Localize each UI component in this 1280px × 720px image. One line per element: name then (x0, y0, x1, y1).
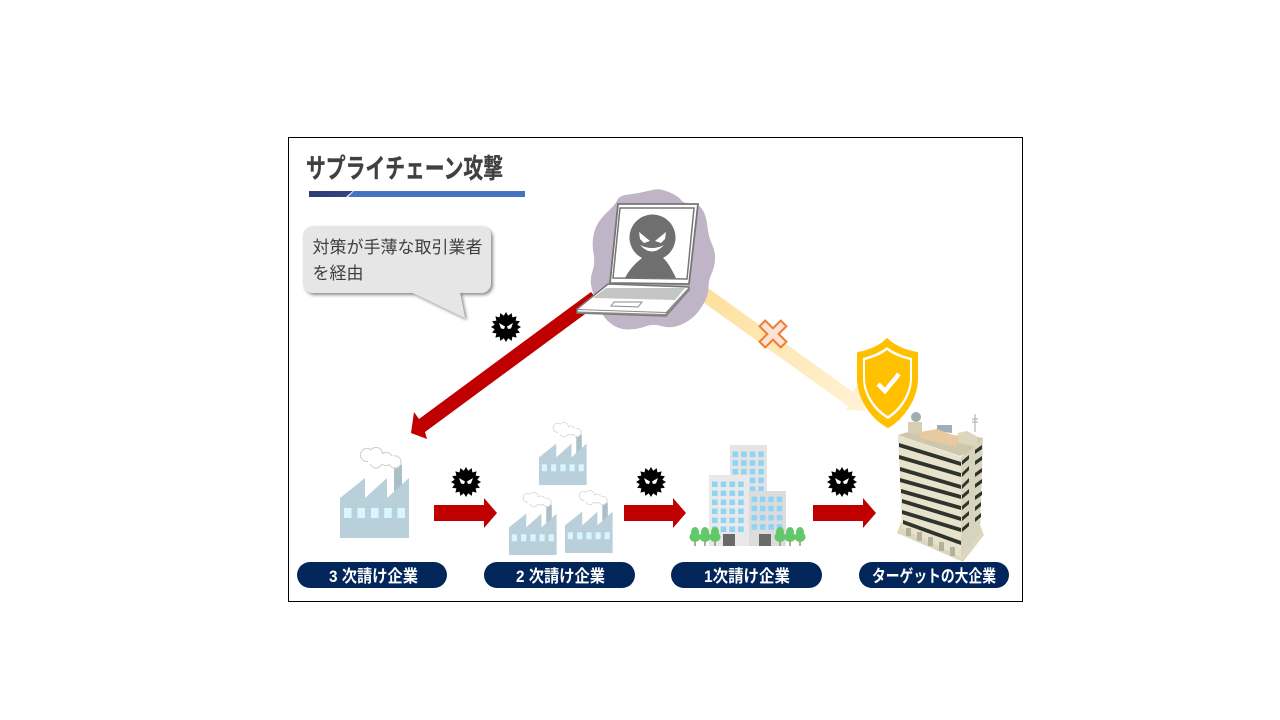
arrow: second to first tier (624, 498, 686, 528)
callout (303, 226, 491, 318)
icon: target building (897, 412, 984, 562)
icon: virus 1 (451, 467, 481, 497)
icon: blocked cross (752, 313, 794, 355)
label: target: ターゲットの大企業 (872, 566, 996, 586)
title: サプライチェーン攻撃 (306, 154, 503, 184)
frame (288, 138, 1022, 602)
callout: を経由 (312, 264, 364, 283)
arrow: third to second tier (434, 498, 497, 528)
icon: virus on attack path (491, 312, 521, 342)
icon: virus 2 (636, 467, 666, 497)
callout: 対策が手薄な取引業者 (312, 238, 482, 257)
icon: hacker cloud (592, 191, 714, 328)
icon: laptop with hacker (577, 204, 698, 316)
label: target (859, 562, 1009, 588)
label: first-tier: 1次請け企業 (704, 566, 790, 586)
arrow: attack on third-tier supplier (411, 292, 600, 439)
icon: security shield (858, 339, 917, 427)
icon: factory, third-tier (340, 448, 409, 538)
label: second-tier: 2 次請け企業 (516, 566, 605, 586)
label: third-tier (297, 562, 447, 588)
icon: office building, first-tier (690, 445, 806, 546)
label: second-tier (484, 562, 635, 588)
arrow: blocked direct attack (703, 288, 866, 411)
label: first-tier (671, 562, 822, 588)
label: third-tier: 3 次請け企業 (329, 566, 418, 586)
icon: factories, second-tier (509, 423, 613, 555)
title underline (309, 191, 525, 197)
arrow: first tier to target (813, 498, 876, 528)
icon: virus 3 (827, 467, 857, 497)
